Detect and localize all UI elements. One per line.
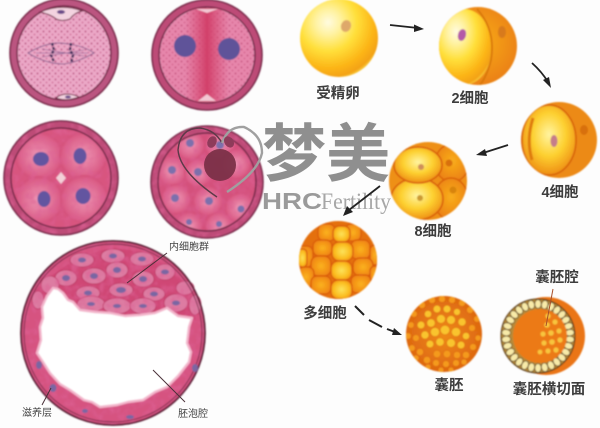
blastula bbox=[405, 296, 482, 373]
two-cell sphere bbox=[436, 7, 517, 85]
stage labels: 受精卵 bbox=[316, 84, 360, 102]
four-cell sphere bbox=[521, 102, 597, 178]
text: pink panel labels: 内细胞群 bbox=[169, 240, 209, 253]
pointer: blastocoel label bbox=[546, 289, 553, 326]
stage labels: 多细胞 bbox=[303, 304, 347, 322]
panel: pink embryo illustrations bbox=[4, 0, 263, 425]
arrow: 4 cells to 8 cells bbox=[476, 145, 508, 156]
two-cell stage bbox=[152, 0, 262, 110]
stage labels: 8细胞 bbox=[414, 222, 452, 240]
watermark: brand: 梦美 bbox=[262, 120, 390, 190]
stage labels: 2细胞 bbox=[451, 89, 489, 107]
stage labels: 4细胞 bbox=[541, 183, 579, 201]
panel: yellow embryo series bbox=[296, 0, 597, 375]
pointer lines bbox=[42, 253, 185, 405]
stage labels bbox=[303, 84, 585, 398]
watermark: brand: Fertility bbox=[321, 189, 391, 214]
multi-cell morula bbox=[296, 221, 380, 299]
stage labels: 囊胚腔 bbox=[535, 268, 579, 286]
arrow: multi-cell to blastula bbox=[355, 306, 402, 335]
blastocoel cavity bbox=[37, 288, 192, 407]
four-cell stage bbox=[4, 121, 118, 235]
watermark: brand: HRC bbox=[262, 188, 322, 214]
text: pink panel labels bbox=[22, 240, 209, 420]
stage labels: 囊胚 bbox=[434, 377, 464, 394]
stage labels: 囊胚横切面 bbox=[513, 381, 585, 398]
text: pink panel labels: 胚泡腔 bbox=[178, 407, 208, 420]
arrow: egg to 2 cells bbox=[390, 24, 424, 32]
icon: watermark logo bbox=[178, 127, 262, 197]
blastula cross-section bbox=[501, 297, 585, 375]
arrows between stages bbox=[343, 24, 551, 335]
arrow: 2 cells to 4 cells bbox=[532, 63, 551, 88]
eight-cell sphere bbox=[389, 142, 469, 220]
fertilized egg bbox=[300, 0, 378, 77]
text: pink panel labels: 滋养层 bbox=[22, 406, 52, 419]
blastocyst cross-section bbox=[21, 241, 205, 425]
zygote with spindle bbox=[10, 0, 118, 107]
arrow: 8 cells to multi-cell bbox=[343, 186, 380, 216]
eight-cell stage bbox=[151, 126, 263, 240]
